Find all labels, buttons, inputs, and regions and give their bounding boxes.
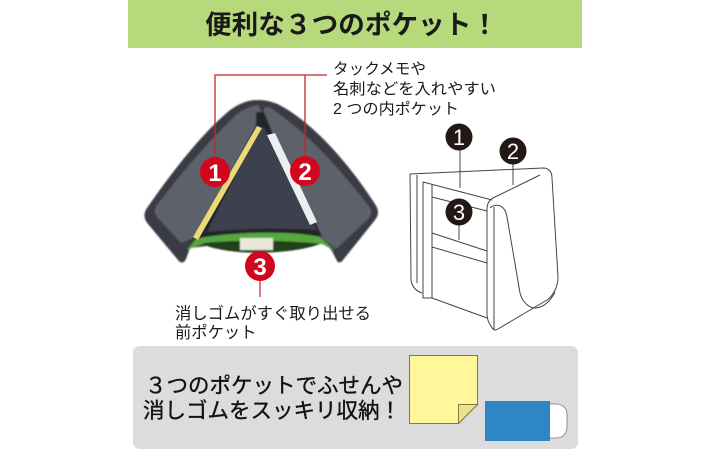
marker 2 red [290,156,320,186]
label: inner pockets: タックメモや [333,60,426,78]
callout text: 消しゴムをスッキリ収納！ [143,399,401,423]
callout text [143,374,403,423]
marker 1 red: 1 [208,160,222,187]
label: front pocket: 前ポケット [175,324,256,342]
title banner [128,0,582,48]
icon: eraser [485,401,567,441]
icon: sticky note [410,356,478,424]
marker 3 dark [446,198,472,240]
marker 3 red [245,251,275,297]
title banner: 便利な３つのポケット！ [205,10,498,40]
label: front pocket [175,304,371,342]
label: inner pockets [333,60,496,118]
callout text: ３つのポケットでふせんや [145,374,403,398]
marker 2 dark: 2 [507,139,519,164]
callout panel [133,346,578,449]
label: front pocket: 消しゴムがすぐ取り出せる [175,304,371,323]
marker 1 dark [446,124,472,188]
label: inner pockets: 名刺などを入れやすい [333,80,496,98]
marker 2 dark [500,138,526,185]
marker 3 dark: 3 [453,200,465,225]
marker 3 red: 3 [253,254,267,281]
white pen in pocket 2 [267,133,317,225]
marker 1 red [200,157,230,187]
marker 2 red: 2 [298,159,312,186]
marker 1 dark: 1 [453,125,465,150]
yellow memo pad in pocket 1 [193,126,262,240]
photo: opened pouch with three pockets [144,100,378,263]
line diagram of pouch [410,168,558,330]
label: inner pockets: 2 つの内ポケット [333,100,459,118]
red leader lines for inner pockets [215,75,327,158]
